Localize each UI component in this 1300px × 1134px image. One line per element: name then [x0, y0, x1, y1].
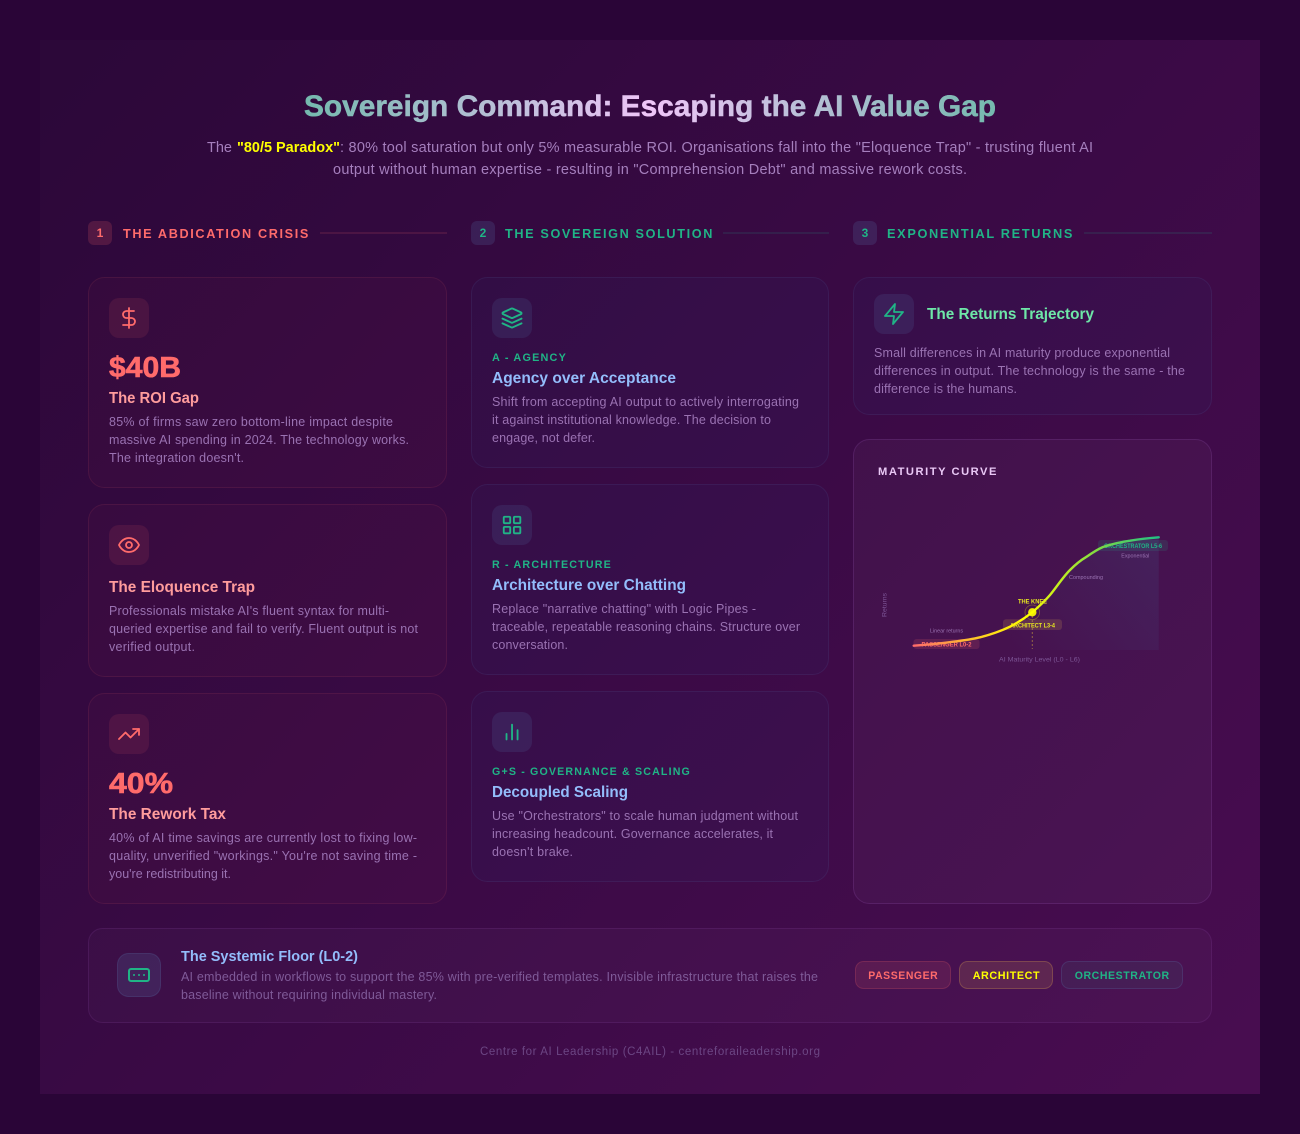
panel: architecture: [472, 484, 828, 674]
card title: Architecture over Chatting: [492, 577, 686, 594]
section heading 1: [88, 221, 447, 245]
card text: [492, 395, 799, 445]
icon: rectangle with dots: [118, 954, 160, 996]
panel: systemic floor: [88, 928, 1212, 1022]
card title: The Rework Tax: [109, 806, 226, 823]
badge: orchestrator: [1062, 962, 1182, 988]
card title: Agency over Acceptance: [492, 370, 676, 387]
panel: maturity curve: [854, 440, 1212, 904]
card title: The Returns Trajectory: [927, 306, 1094, 323]
card text: traceable, repeatable reasoning chains. Structure over: [492, 620, 800, 634]
knee marker: [1018, 599, 1047, 620]
card text: differences in output. The technology is the same - the: [874, 364, 1185, 378]
card text: Replace "narrative chatting" with Logic Pipes -: [492, 602, 756, 616]
card text: 85% of firms saw zero bottom-line impact despite: [109, 415, 393, 429]
subtitle: "80/5 Paradox": [237, 140, 340, 156]
card text: [109, 831, 417, 881]
tag: architect: ARCHITECT L3-4: [1010, 622, 1055, 630]
panel: eloquence trap: [88, 504, 446, 676]
card label: A - AGENCY: [492, 352, 567, 364]
floor text: baseline without requiring individual mastery.: [181, 988, 437, 1002]
subtitle: [207, 140, 1093, 178]
card title: The ROI Gap: [109, 390, 199, 407]
card text: 40% of AI time savings are currently lost to fixing low-: [109, 831, 417, 845]
badge: passenger: PASSENGER: [868, 970, 938, 982]
subtitle: output without human expertise - resulting in "Comprehension Debt" and massive rework costs.: [333, 162, 967, 178]
footer: Centre for AI Leadership (C4AIL) - centreforaileadership.org: [480, 1046, 820, 1058]
floor title: The Systemic Floor (L0-2): [181, 949, 358, 965]
icon: trending up: [109, 714, 149, 754]
card text: difference is the humans.: [874, 382, 1017, 396]
panel: rework tax: [88, 694, 446, 904]
badge: orchestrator: ORCHESTRATOR: [1075, 970, 1170, 982]
tag: orchestrator: ORCHESTRATOR L5-6: [1104, 543, 1162, 550]
annotations: [930, 554, 1149, 635]
badge: passenger: [856, 962, 950, 988]
section heading 3: EXPONENTIAL RETURNS: [887, 227, 1074, 241]
annotations: Exponential: [1121, 554, 1149, 560]
icon: bar chart: [492, 712, 532, 752]
card title: Decoupled Scaling: [492, 784, 628, 801]
floor text: AI embedded in workflows to support the 85% with pre-verified templates. Invisible infrastructure that raises the: [181, 970, 818, 984]
tag: architect: [1003, 619, 1062, 630]
panel: decoupled scaling: [472, 692, 828, 882]
section heading 1: 1: [97, 226, 104, 240]
icon: grid: [492, 505, 532, 545]
section heading 1: THE ABDICATION CRISIS: [123, 227, 310, 241]
badge: architect: [960, 962, 1052, 988]
card text: [109, 415, 409, 465]
section heading 3: 3: [862, 226, 869, 240]
subtitle: The: [207, 140, 232, 156]
card text: Small differences in AI maturity produce exponential: [874, 346, 1170, 360]
chart: s-curve: [882, 537, 1168, 664]
panel: agency: [472, 278, 828, 468]
card text: doesn't brake.: [492, 845, 573, 859]
icon: eye: [109, 525, 149, 565]
card text: The integration doesn't.: [109, 451, 244, 465]
annotations: Compounding: [1069, 575, 1103, 581]
tag: orchestrator: [1098, 540, 1168, 551]
panel: returns trajectory: [854, 278, 1212, 414]
title: Sovereign Command: Escaping the AI Value Gap: [304, 90, 996, 123]
section heading 2: [471, 221, 829, 245]
y axis label: Returns: [882, 592, 888, 617]
stat: $40B: $40B: [109, 352, 181, 384]
card text: increasing headcount. Governance accelerates, it: [492, 827, 774, 841]
card text: Use "Orchestrators" to scale human judgment without: [492, 809, 799, 823]
card title: The Eloquence Trap: [109, 579, 255, 596]
card text: conversation.: [492, 638, 568, 652]
card text: verified output.: [109, 640, 195, 654]
card text: Shift from accepting AI output to actively interrogating: [492, 395, 799, 409]
card text: you're redistributing it.: [109, 867, 231, 881]
card text: quality, unverified "workings." You're not saving time -: [109, 849, 417, 863]
badge: architect: ARCHITECT: [973, 970, 1040, 982]
annotations: Linear returns: [930, 629, 963, 635]
panel: ROI gap: [88, 278, 446, 488]
card text: [874, 346, 1185, 396]
icon: layers: [492, 298, 532, 338]
card text: queried expertise and fail to verify. Fluent output is not: [109, 622, 419, 636]
floor text: [181, 970, 818, 1002]
card text: [492, 809, 799, 859]
stat: 40%: 40%: [109, 768, 173, 800]
subtitle: : 80% tool saturation but only 5% measurable ROI. Organisations fall into the "Eloquence Trap" - trusting fluent AI: [340, 140, 1093, 156]
card text: engage, not defer.: [492, 431, 595, 445]
tag: passenger: [914, 639, 980, 649]
icon: lightning: [874, 294, 914, 334]
knee marker: THE KNEE: [1018, 599, 1047, 606]
section heading 2: THE SOVEREIGN SOLUTION: [505, 227, 714, 241]
card text: massive AI spending in 2024. The technology works.: [109, 433, 409, 447]
section heading 2: 2: [480, 226, 487, 240]
card label: G+S - GOVERNANCE & SCALING: [492, 766, 691, 778]
x axis label: AI Maturity Level (L0 - L6): [999, 657, 1080, 664]
card text: Professionals mistake AI's fluent syntax for multi-: [109, 604, 389, 618]
card text: [109, 604, 419, 654]
chart heading: MATURITY CURVE: [878, 466, 998, 478]
card text: it against institutional knowledge. The decision to: [492, 413, 771, 427]
section heading 3: [853, 221, 1212, 245]
card label: R - ARCHITECTURE: [492, 559, 612, 571]
icon: dollar: [109, 298, 149, 338]
card text: [492, 602, 800, 652]
tag: passenger: PASSENGER L0-2: [922, 642, 972, 648]
